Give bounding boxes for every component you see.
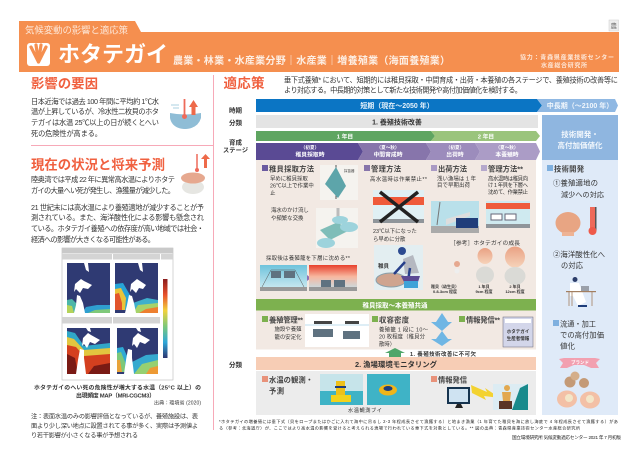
illustration: spat collector [320,165,358,200]
illustration: shipping truck [431,201,479,233]
illustration: buoy top view [367,374,410,405]
panel: technology development [542,160,618,415]
text: high temperature: 高水温時は作業禁止** [370,175,428,183]
year arrows: 1 年目 [337,132,353,140]
growth size labels [431,283,525,294]
illustration: scallop growth [454,246,526,285]
text: main culture: 沈めて、作業禁止 [488,188,529,196]
text block: impact factors [31,97,159,138]
text: stable facilities: 籠の安定化 [275,333,302,341]
intro text: 垂下式養殖* において、短期的には稚貝採取・中間育成・出荷・本養殖の各ステージで、養殖技術の改善等に [284,76,618,84]
text block: Mutsu Bay [31,175,175,195]
reference heading: scallop growth: ［参考］ホタテガイの成長 [450,239,520,247]
category band: monitoring: 2. 漁場環境モニタリング [355,360,438,369]
ribbon: brand [559,358,600,368]
stage heading: management: 管理方法 [371,164,402,174]
icon: scallop logo [27,43,50,66]
intro text [284,76,618,94]
text: water exchange: や頻繁な交換 [271,214,304,222]
timeline: mid to long term: 中長期（～2100 年） [547,101,613,110]
cooperation credit [520,54,614,70]
stage arrows: 稚貝採取時 [296,150,325,158]
illustration: poster [503,317,533,347]
map panel: RCP2.6 near future [115,263,158,313]
map colour scale [163,279,168,358]
category box: technology development: 高付加価値化 [558,140,603,150]
map caption [34,384,201,400]
band: common measures: 稚貝採取～本養殖共通 [362,300,428,310]
icon: water temperature rising [170,99,201,129]
illustration: spat collector: 採苗器 [344,168,355,173]
text: main culture [488,174,529,196]
stage arrows: 出荷時 [446,150,464,158]
text block: Mutsu Bay: ガイの大量へい死が発生し、漁獲量が減少した。 [31,186,175,195]
growth size labels: 2 年貝 [509,283,521,289]
heading: distribution and processing [553,320,604,350]
icon: scallop and thermometer [556,207,596,236]
illustration: stable cages [305,314,369,347]
stamp: region mark: 農 [610,21,618,30]
map panel: RCP8.5 far future [67,328,110,374]
text: stocking density: 養殖籠 1 段に 10～ [379,326,429,334]
column dividers [31,75,214,430]
map panel: RCP2.6 far future [117,328,158,374]
text: water exchange: 海水のかけ流し [271,206,309,214]
text: stocking density: 散時） [379,340,395,348]
illustration: sunk cages [486,201,530,228]
category: aquaculture improvement: 1. 養殖技術改善 [372,118,422,126]
text: spat collection [270,174,314,197]
stage arrows: （初夏） [446,144,464,151]
illustration: tanks [316,208,358,248]
arrow: monitoring supports improvement [385,348,405,358]
text block: future projection: ている。ホタテガイ養殖への依存度が高い地域では社会・ [31,224,204,233]
arrow: lower cages [307,275,311,281]
illustration: buoy side view [320,374,363,405]
row labels [223,106,248,369]
illustration: poster: 生産者情報 [507,335,530,342]
row labels: ステージ [223,148,248,154]
heading: adaptation measures: 適応策 [224,75,265,91]
heading: distribution and processing: 流通・加工 [560,320,596,328]
footnotes: *ホタテガイの増養殖には垂下式（貝をロープまたはかごに入れて海中に吊るし 2-3 年程成長させて漁獲する）と地まき漁業（1 年育てた稚貝を海に放し海底で 4 年程成長させて漁獲する）があ [219,418,618,425]
heading: current status and projection: 現在の状況と将来予測 [31,156,165,172]
category band: monitoring [256,357,536,370]
row labels: 分類 [229,360,242,369]
icon: monitor [447,387,470,408]
stamp: region mark [609,20,618,31]
stage heading: management 2: 管理方法** [488,164,523,174]
text: sink cages: 採取後は養殖籠を下層に沈める** [266,254,351,262]
stage arrows: 本養殖時 [495,150,519,158]
text: spat collection: 早めに稚貝採取 [270,174,308,182]
growth size labels: 9cm 程度 [475,288,493,294]
note: り若干影響が小さくなる事が予想される [31,432,138,440]
stage arrows: （初夏） [301,144,319,151]
panel: monitoring [256,371,536,415]
heading: information 1: 情報発信** [466,316,500,324]
illustration: crossed cages [373,190,424,223]
text block: impact factors: 温が上昇しているが、冷水性二枚貝のホタ [31,107,159,116]
arrow label: 1. 養殖技術改善に不可欠 [410,350,476,358]
footnotes [219,418,618,432]
growth size labels: 稚貝（幼生貝） [431,283,459,289]
text: shipping: 目で早期出荷 [437,181,471,189]
text: acidification [553,250,606,270]
text: stable facilities [275,325,302,341]
icon: scallop with temperature arrows [181,154,210,194]
text: stocking density: 20 枚程度（稚貝分 [379,332,426,340]
ribbon: brand: ブランド [571,359,589,366]
illustration: density cones [431,313,452,346]
heading: water temperature [262,376,313,396]
category: aquaculture improvement [256,115,538,128]
heading: water temperature: 水温の観測・ [269,376,313,384]
heading: distribution and processing: 値化 [560,340,576,350]
text: stable facilities: 施設や養殖 [275,325,302,333]
icon: lightning signal [471,385,500,400]
text: dispersal: 23℃以下になった [373,228,417,235]
text: spat collection: 26℃以上で作業中 [270,182,314,190]
heading: information 2: 情報発信 [438,376,468,384]
cooperation credit: 協力：青森県産業技術センター [520,54,614,62]
category box: technology development: 技術開発・ [561,129,599,139]
text block: future projection: 21 世紀末には高水温により養殖適地が減少することが予 [31,203,204,212]
note [31,412,198,440]
growth size labels: 12cm 程度 [505,288,525,294]
text: dispersal: ら早めに分散 [373,235,406,243]
stage arrows [256,143,540,160]
category box: technology development [542,115,618,160]
text: dispersal [373,228,417,243]
buoy caption: 水温観測ブイ [348,406,382,414]
illustration: cages after [309,265,357,291]
header banner [19,21,619,72]
timeline: short term: 短期（現在～2050 年） [360,101,434,110]
text: acidification: の対応 [561,261,583,270]
text block: Mutsu Bay: 陸奥湾では平成 22 年に異常高水温によりホタテ [31,175,175,184]
growth size labels: 1 年貝 [478,283,490,289]
text: stocking density [379,326,429,348]
text block: impact factors: 死の危険性が高まる。 [31,129,102,138]
year arrows: 2 年目 [478,132,494,140]
text: main culture: 高水温時は稚貝向 [488,174,528,182]
text: suitable area [553,178,604,199]
panel: common measures [256,310,536,350]
illustration: worker sorting spat [374,245,423,290]
chart: distribution maps [62,248,173,380]
illustration: worker sorting spat: 稚貝 [378,262,390,270]
publication credit: 国立環境研究所 気候変動適応センター 2021 年 7 月初版 [512,434,621,441]
growth size labels: 0.8-3cm 程度 [433,288,457,294]
panel: stage measures [256,160,536,299]
text: shipping [437,174,477,189]
footnotes: る（参考：北海道庁）が、ここではより高水温の影響を受けると考えられる漁場で行われている垂下式を対象としている。** 図の出典：青森県産業技術センター水産総合研究所 [219,424,581,432]
text: spat collection: 止 [270,189,276,197]
year arrows [256,131,540,141]
heading: stocking density: 収容密度 [379,316,410,324]
heading: technology development: 技術開発 [554,164,585,174]
illustration: scallop meat [557,372,600,408]
row labels: 分類 [229,118,242,127]
timeline: mid to long term [537,99,618,112]
map caption: 出現頻度 MAP（MRI-CGCM3） [76,392,155,400]
timeline: short term [256,99,542,112]
cooperation credit: 水産総合研究所 [541,62,587,70]
map source: 出典：環境省 (2020) [154,400,201,406]
map panel: present [67,263,110,313]
heading: distribution and processing: での高付加価 [560,330,604,340]
text: suitable area: 減少への対応 [561,190,604,199]
stage arrows: （夏～秋） [377,144,399,151]
stage arrows: （夏～秋） [496,144,518,151]
illustration: poster: ホタテガイ [507,328,529,335]
stage arrows: 中間育成時 [374,150,403,158]
text: water exchange [271,206,309,222]
main title: ホタテガイ [58,42,168,67]
row labels: 時期 [229,106,242,114]
text: main culture: け 1 年貝を下層へ [488,181,529,189]
stage heading: spat collection: 稚貝採取方法 [269,164,315,174]
text: acidification: ②海洋酸性化へ [553,250,606,259]
heading: culture management: 養殖管理** [269,316,303,324]
text block: impact factors: テガイは水温 25℃以上の日が続くとへい [31,118,159,127]
heading: water temperature: 予測 [269,386,284,396]
heading: impact factors: 影響の要因 [31,75,98,91]
illustration: cages before [260,265,307,291]
note: 面より少し深い地点に設置されてる事が多く、実際は予測値よ [31,422,198,430]
text block: future projection: 測されている。また、海洋酸性化による影響も懸念され [31,213,204,222]
sector subtitle: 農業・林業・水産業分野｜水産業｜増養殖業（海面養殖業） [173,54,450,67]
header category tab label: 気候変動の影響と適応策 [25,24,129,36]
map caption: ホタテガイのへい死の危険性が増大する水温（25°C 以上）の [34,384,201,392]
text: suitable area: ①養殖適地の [553,178,598,188]
stage heading: shipping: 出荷方法 [438,164,468,174]
row labels: 育成 [229,138,242,146]
intro text: より対応する。中長期的対策として新たな技術開発や高付加価値化を検討する。 [284,86,522,94]
note: 注：表面水温のみの影響評価となっているが、養殖施設は、表 [31,412,198,420]
text block: impact factors: 日本近海では過去 100 年間に平均約 1℃水 [31,97,159,106]
text block: future projection: 経済への影響が大きくなる可能性がある。 [31,235,155,244]
illustration: fisherman checking information [493,384,528,410]
text block: future projection [31,203,204,244]
text: shipping: 浅い漁場は 1 年 [437,174,477,182]
illustration: researcher at desk [566,277,596,307]
band: common measures [256,299,536,310]
